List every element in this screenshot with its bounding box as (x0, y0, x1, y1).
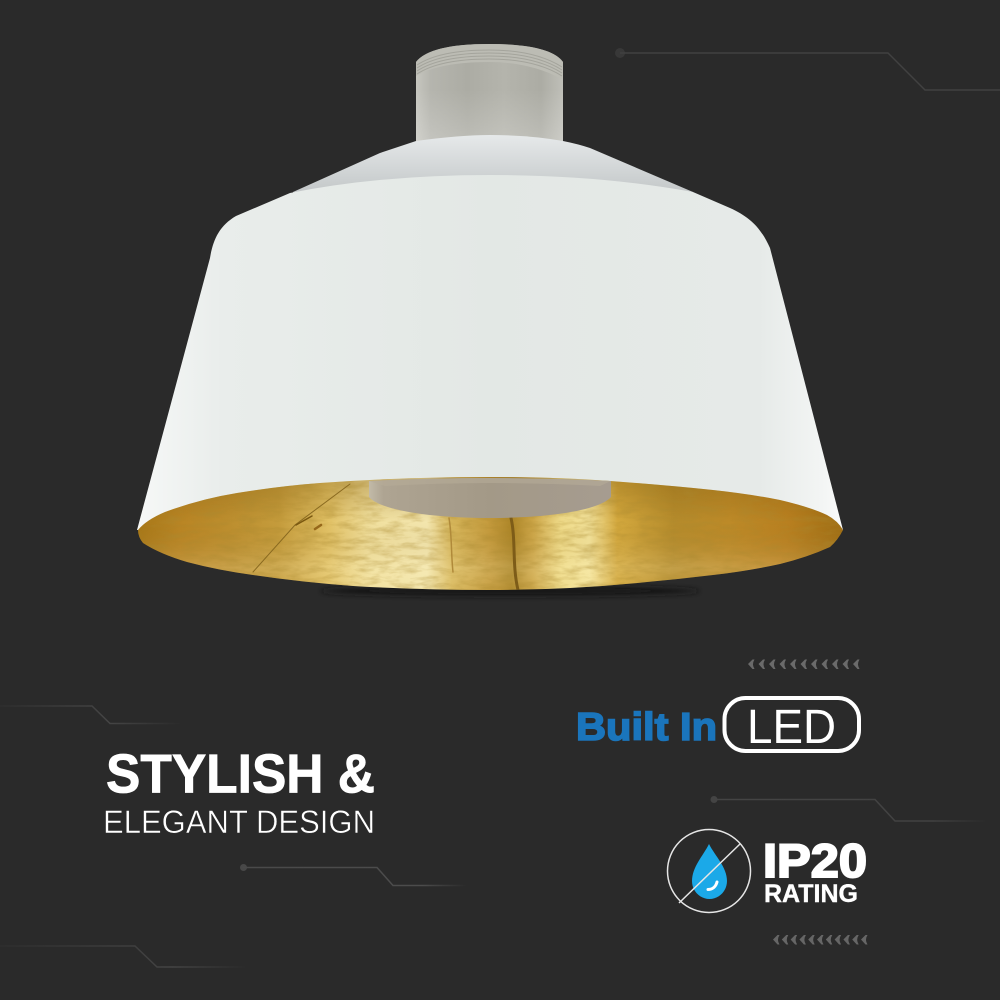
circuit line: top right (615, 48, 1000, 90)
built in LED badge (576, 698, 859, 754)
rating text: RATING (764, 880, 858, 908)
gold leaf texture (158, 478, 834, 590)
lamp neck (416, 44, 563, 145)
lamp shade body (137, 175, 843, 530)
LED outlined pill (724, 698, 859, 754)
chevrons: bottom (773, 935, 868, 944)
lamp shade shoulder (290, 135, 693, 210)
circuit line: left middle (240, 864, 468, 886)
gold leaf cracks (253, 484, 518, 590)
LED outlined pill: LED (747, 701, 836, 754)
IP20 text: IP20 (763, 834, 867, 887)
circuit line: left lower (0, 946, 248, 967)
icon: crossed water drop (668, 830, 750, 912)
circuit line: left upper (0, 706, 183, 724)
lamp shadow (320, 586, 700, 596)
heading: stylish and: STYLISH & (106, 742, 375, 804)
pendant lamp photo (130, 44, 850, 596)
gold inner rim (138, 477, 843, 590)
LED diffuser (369, 478, 611, 518)
IP20 rating badge (668, 830, 867, 912)
chevrons: top (748, 660, 860, 669)
subheading: elegant design: ELEGANT DESIGN (103, 804, 375, 840)
circuit line: right lower (710, 796, 987, 821)
built in label: Built In (576, 706, 717, 749)
